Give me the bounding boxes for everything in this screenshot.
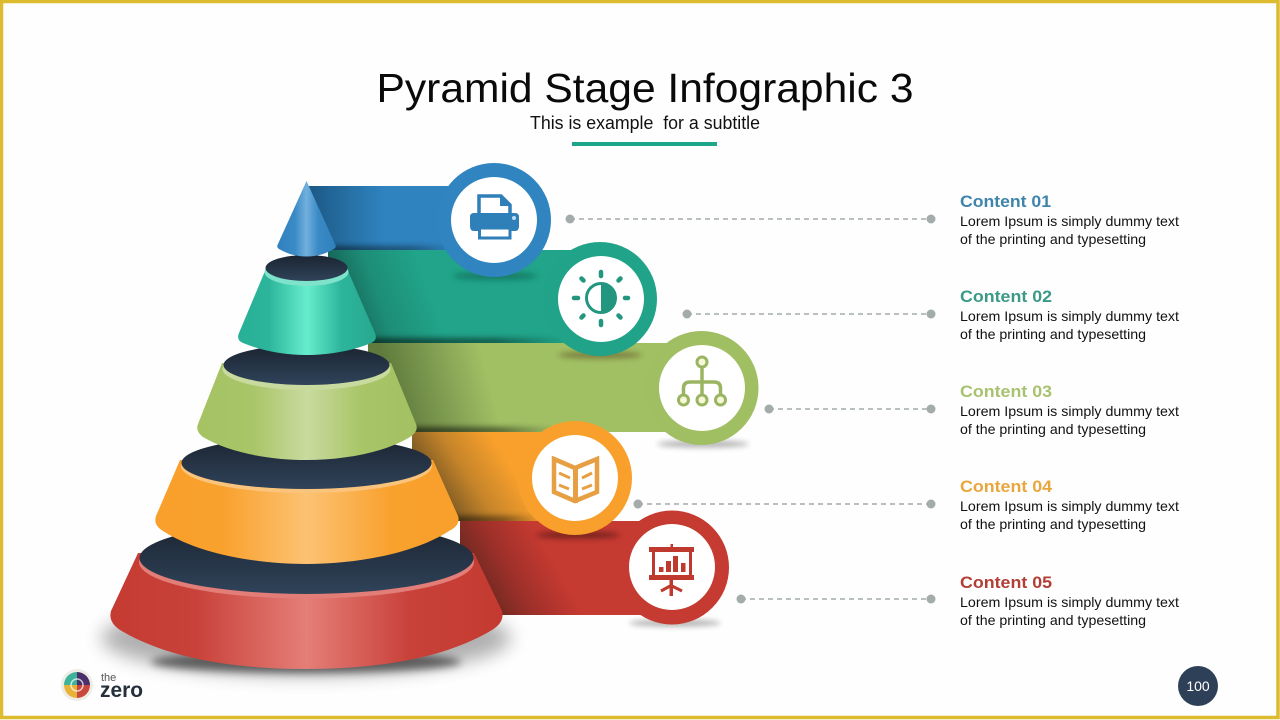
text block: content 04: of the printing and typesetting (960, 516, 1146, 532)
connector 2 (682, 310, 936, 318)
text block: content 04: Lorem Ipsum is simply dummy text (960, 498, 1179, 514)
node 5: presentation icon (615, 510, 729, 626)
band: level 4 orange (412, 432, 542, 524)
title underline (572, 142, 717, 146)
text block: content 01: Lorem Ipsum is simply dummy text (960, 213, 1179, 229)
node 2: brightness icon (543, 242, 657, 358)
logo (61, 669, 143, 702)
text block: content 03: Lorem Ipsum is simply dummy text (960, 403, 1179, 419)
subtitle: This is example for a subtitle (530, 113, 760, 133)
band: level 1 blue (308, 186, 448, 250)
text block: content 01: of the printing and typesetting (960, 231, 1146, 247)
text block: content 03 (960, 382, 1179, 437)
text block: content 05 (960, 573, 1179, 628)
band: level 2 teal (328, 250, 578, 346)
text block: content 04: Content 04 (960, 477, 1053, 496)
text block: content 01: Content 01 (960, 192, 1051, 211)
tier 3: lime (197, 345, 417, 460)
text block: content 03: of the printing and typesetting (960, 421, 1146, 437)
logo: the (101, 672, 116, 684)
band: level 5 red (460, 521, 650, 615)
tier 4: orange (155, 437, 459, 564)
text block: content 05: of the printing and typesetting (960, 612, 1146, 628)
connector 3 (764, 404, 936, 414)
pyramid ground shadow (101, 600, 511, 676)
band: level 3 lime (368, 343, 678, 435)
node 4: book icon (518, 421, 632, 538)
text block: content 05: Content 05 (960, 573, 1052, 592)
connector 4 (634, 500, 936, 508)
text block: content 04 (960, 477, 1179, 532)
node 1: printer icon (437, 163, 551, 280)
text block: content 02: of the printing and typesetting (960, 326, 1146, 342)
text block: content 02: Lorem Ipsum is simply dummy text (960, 308, 1179, 324)
logo: zero (100, 679, 143, 702)
node 3: hierarchy icon (644, 331, 758, 448)
tier 5: red (110, 522, 503, 669)
page number (1178, 666, 1218, 706)
text block: content 05: Lorem Ipsum is simply dummy text (960, 594, 1179, 610)
connector 5 (736, 594, 936, 604)
tier 1: blue cone (277, 181, 336, 256)
title: Pyramid Stage Infographic 3 (376, 65, 914, 111)
tier 2: teal (238, 255, 376, 355)
text block: content 01 (960, 192, 1179, 247)
text block: content 03: Content 03 (960, 382, 1052, 401)
text block: content 02: Content 02 (960, 287, 1052, 306)
connector 1 (566, 214, 936, 224)
page number: 100 (1186, 678, 1210, 694)
pyramid (101, 181, 511, 676)
text block: content 02 (960, 287, 1179, 342)
